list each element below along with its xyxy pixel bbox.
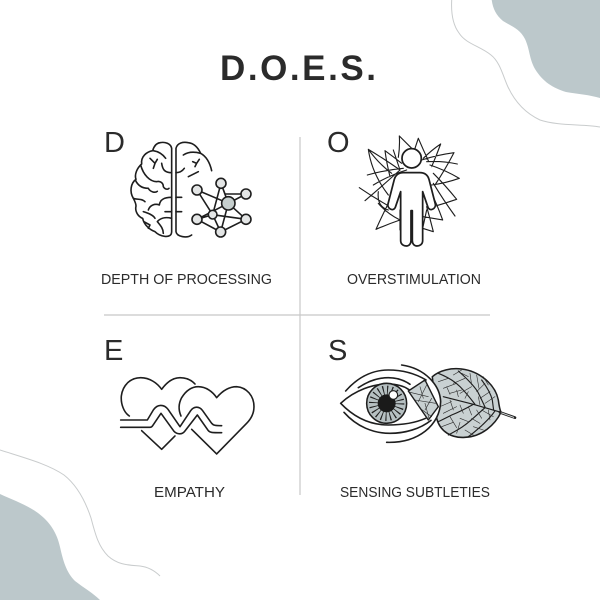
letter D: D — [104, 127, 125, 159]
vertical divider — [299, 137, 301, 495]
label: SENSING SUBTLETIES — [340, 485, 490, 501]
icon: person with chaotic lines — [359, 136, 459, 246]
panel: sensing subtleties — [328, 335, 515, 501]
leaf — [432, 369, 501, 437]
lens fragment — [408, 380, 438, 420]
letter O: O — [327, 127, 350, 159]
letter S: S — [328, 335, 347, 367]
person — [388, 173, 435, 246]
title: D.O.E.S. — [220, 49, 376, 88]
panel: empathy — [104, 335, 254, 501]
letter E: E — [104, 335, 123, 367]
icon: hearts with pulse — [121, 378, 254, 454]
iris — [367, 383, 407, 423]
lens sweep — [387, 365, 441, 442]
corner blob: bottom left — [0, 450, 160, 600]
eye lids — [341, 384, 426, 425]
label: EMPATHY — [154, 485, 225, 501]
horizontal divider — [104, 314, 490, 316]
panel: depth of processing — [101, 127, 272, 288]
panel: overstimulation — [327, 127, 481, 288]
label: DEPTH OF PROCESSING — [101, 272, 272, 288]
corner blob: top right — [452, 0, 600, 127]
icon: eye, lens and leaf — [341, 365, 515, 442]
icon: brain and network — [131, 142, 251, 237]
label: OVERSTIMULATION — [347, 272, 481, 288]
